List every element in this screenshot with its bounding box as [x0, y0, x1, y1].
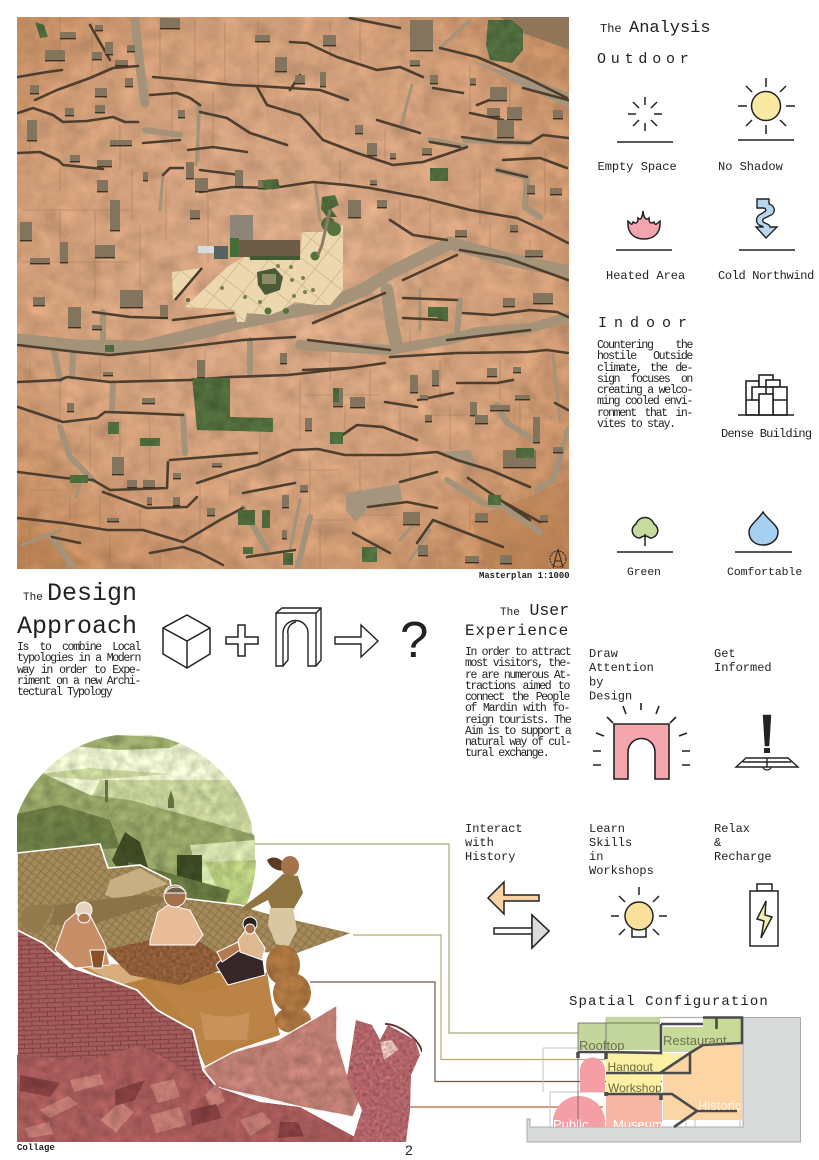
label: Interact with History: History [465, 850, 515, 864]
wide streets [17, 20, 570, 567]
red brick foreground [17, 930, 366, 1142]
heading: The Design Approach: Design [47, 579, 137, 608]
icon: comfortable drop [735, 512, 792, 552]
greenery [35, 20, 534, 565]
text: indoor description: vites to stay. [597, 418, 675, 431]
icon: no shadow sun [738, 78, 795, 140]
text: user experience description: In order to attract [465, 646, 570, 659]
clay boulders [266, 945, 311, 1033]
heading: The User Experience: User [530, 601, 569, 620]
heading: The Analysis: The [600, 22, 622, 36]
text: user experience description: tural exchange. [465, 747, 548, 760]
text: user experience description: tractions aimed to [465, 680, 569, 693]
dark street edges [18, 18, 568, 565]
icon: exchange arrows [488, 882, 549, 948]
zone labels [553, 1033, 742, 1132]
heading: The Analysis: Analysis [629, 19, 711, 38]
icon: heated area [616, 211, 672, 250]
icon: battery [750, 884, 778, 946]
text: user experience description: re are numerous At- [465, 668, 570, 682]
zone labels: Rooftop [579, 1038, 625, 1053]
text: user experience description: Aim is to support a [465, 725, 570, 738]
spatial configuration section diagram [527, 1017, 800, 1142]
text: design approach description: riment on a new Archi- [17, 675, 140, 688]
icon: dense building [738, 375, 794, 415]
clay bowl on wheel [75, 940, 280, 1066]
label: Cold Northwind: Cold Northwind [718, 269, 814, 283]
text: design approach description [17, 641, 141, 699]
text: indoor description: sign focuses on [597, 373, 692, 386]
zone labels: Hangout [608, 1060, 654, 1074]
label: Relax & Recharge: & [714, 836, 721, 850]
green townscape [10, 730, 260, 905]
icon: light bulb [611, 887, 667, 937]
text: user experience description: reign tourists. The [465, 714, 570, 726]
rooftop zone [578, 1017, 660, 1050]
heading: The Design Approach: Approach [17, 612, 137, 641]
label: Draw Attention by Design: Design [589, 690, 632, 704]
icon: plus [226, 625, 258, 656]
icon: cube [163, 615, 210, 668]
label: Learn Skills in Workshops: in [589, 850, 603, 864]
zone labels: Museum [613, 1117, 663, 1132]
potters [55, 885, 265, 985]
text: user experience description: most visitors, the- [465, 657, 570, 670]
label: Get Informed: Informed [714, 661, 772, 675]
heading: The User Experience: The [500, 607, 520, 619]
zone labels: Restaurant [663, 1033, 727, 1048]
collage caption: Collage [17, 1143, 55, 1153]
icon: arrow [335, 625, 378, 657]
running girl [243, 856, 303, 947]
label: Relax & Recharge: Recharge [714, 850, 772, 864]
second brick wall [203, 1005, 363, 1117]
section walls [578, 1018, 742, 1127]
text: indoor description: ronment that in- [597, 406, 692, 420]
label: Relax & Recharge: Relax [714, 822, 750, 836]
icon: arch volume [276, 608, 321, 666]
icon: empty space [617, 97, 673, 142]
icon: cold northwind [739, 199, 795, 250]
hangout and workshop zone [606, 1053, 690, 1094]
text: indoor description: Countering the [597, 339, 692, 352]
label: Comfortable: Comfortable [727, 567, 802, 579]
icon: north compass [550, 549, 566, 568]
ground and hillside [527, 1018, 800, 1142]
text: indoor description: ming cooled envi- [597, 395, 692, 408]
text: design approach description: Is to combine Local [17, 641, 140, 654]
text: indoor description: hostile Outside [597, 350, 692, 363]
carpet and sofa [17, 844, 353, 955]
label: Get Informed: Get [714, 647, 736, 661]
plaza [172, 210, 343, 322]
masterplan map [17, 17, 570, 569]
label: Learn Skills in Workshops: Skills [589, 836, 632, 850]
label: Draw Attention by Design: Draw [589, 647, 619, 661]
label: Dense Building: Dense Building [721, 427, 812, 441]
zone labels: Workshop [608, 1081, 662, 1095]
heading: The User Experience: Experience [465, 622, 569, 640]
icon: green tree [617, 518, 673, 552]
text: indoor description: creating a welco- [597, 384, 692, 397]
collage [10, 730, 422, 1142]
text: user experience description: connect the People [465, 691, 569, 704]
label: Heated Area: Heated Area [606, 269, 685, 283]
heading: Spatial Configuration: Spatial Configuration [569, 994, 769, 1010]
public and hangout domes [553, 1058, 605, 1127]
text: user experience description [465, 646, 572, 760]
label: Learn Skills in Workshops: Learn [589, 822, 625, 836]
connector lines [255, 844, 662, 1107]
heading: The Design Approach: The [23, 592, 43, 604]
icon: pink arch with rays [593, 703, 690, 779]
icon: exclamation over book [736, 715, 798, 770]
courtyards [20, 18, 563, 563]
zone labels: Public [553, 1117, 589, 1132]
text: design approach description: tectural Typology [17, 686, 111, 699]
label: Empty Space: Empty Space [598, 160, 677, 174]
label: Draw Attention by Design: Attention [589, 661, 654, 675]
label: Interact with History: with [465, 836, 494, 850]
woman in patterned dress [347, 1020, 422, 1142]
museum zone [606, 1095, 662, 1127]
heading: The Design Approach [17, 579, 137, 641]
text: user experience description: of Mardin with fo- [465, 702, 569, 715]
historic zone [663, 1045, 742, 1120]
label: No Shadow: No Shadow [718, 160, 784, 174]
text: indoor description: climate, the de- [597, 362, 692, 374]
heading: Outdoor: Outdoor [597, 51, 694, 68]
zone labels: Historic [698, 1098, 742, 1113]
label: Green: Green [627, 567, 661, 579]
text: user experience description: natural way of cul- [465, 736, 570, 749]
text: indoor description [597, 339, 693, 431]
label: Learn Skills in Workshops: Workshops [589, 864, 654, 878]
masterplan caption: Masterplan 1:1000 [479, 571, 570, 581]
label: Interact with History: Interact [465, 822, 523, 836]
heading: Indoor: Indoor [598, 315, 694, 332]
page number: 2 [405, 1142, 413, 1158]
restaurant zone [663, 1017, 742, 1052]
text: design approach description: way in order to Expe- [17, 664, 140, 676]
plot lines [22, 17, 545, 569]
text: design approach description: typologies in a Modern [17, 652, 140, 665]
heading: The User Experience [465, 601, 569, 640]
question mark: ? [400, 611, 428, 668]
label: Draw Attention by Design: by [589, 675, 603, 689]
